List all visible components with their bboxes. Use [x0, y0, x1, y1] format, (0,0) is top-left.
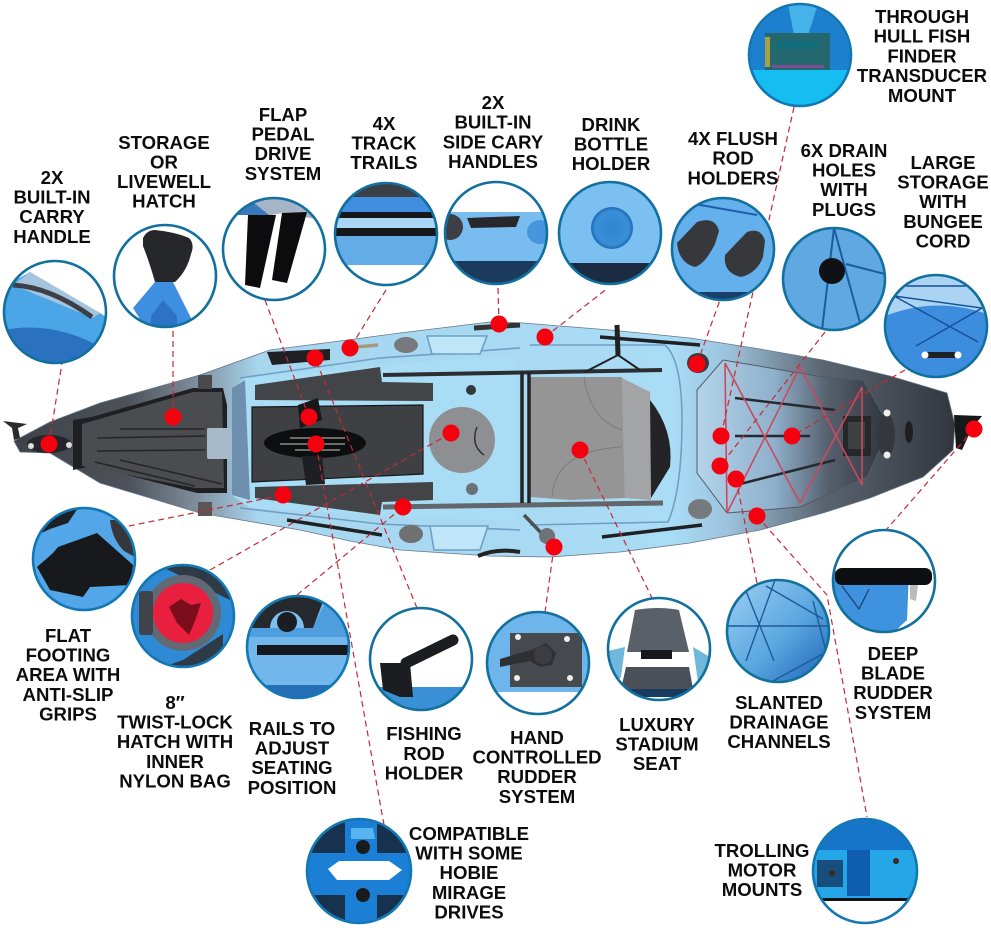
label: trolling motor mounts: MOTOR	[728, 860, 797, 881]
label: track trails: TRAILS	[350, 152, 418, 173]
photo: bottle cup	[559, 182, 661, 284]
label: side carry handles: HANDLES	[448, 151, 538, 172]
label: fish finder mount: MOUNT	[888, 85, 957, 106]
label: deep blade rudder: SYSTEM	[855, 702, 931, 723]
bow carry handle	[27, 435, 72, 453]
label: bungee storage: STORAGE	[897, 172, 989, 193]
label: seating rails: RAILS TO	[249, 718, 335, 739]
label: hobie mirage compatibility: MIRAGE	[432, 882, 506, 903]
callout markers	[40, 316, 982, 556]
label: side carry handles: BUILT-IN	[454, 112, 532, 133]
label: flap pedal drive: PEDAL	[251, 124, 315, 145]
label: twist-lock hatch: TWIST-LOCK	[117, 712, 233, 733]
label: flat footing: ANTI-SLIP	[23, 684, 113, 705]
hatch clasp	[207, 428, 235, 459]
label: fish finder mount: HULL FISH	[874, 26, 970, 47]
round twist-lock hatch	[429, 385, 495, 495]
label: twist-lock hatch: 8″	[165, 692, 185, 713]
label: flush rod holders: 4X FLUSH	[688, 128, 778, 149]
bungee cord	[725, 363, 862, 513]
label: stadium seat: STADIUM	[615, 734, 699, 755]
label: drink bottle holder: HOLDER	[572, 153, 651, 174]
label: bungee storage: WITH	[919, 191, 967, 212]
panel: track trails	[335, 113, 437, 285]
label: fishing rod holder: ROD	[403, 743, 445, 764]
panel: hand rudder	[472, 612, 602, 807]
panel: drainage channels	[727, 580, 831, 752]
label: carry handle: BUILT-IN	[13, 187, 91, 208]
label: carry handle: CARRY	[19, 206, 85, 227]
label: drink bottle holder: DRINK	[582, 114, 641, 135]
label: fish finder mount: FINDER	[887, 45, 957, 66]
seating rail bottom	[383, 503, 663, 507]
photo: track rails	[335, 183, 437, 285]
label: drink bottle holder: BOTTLE	[574, 134, 648, 155]
label: fishing rod holder: HOLDER	[385, 763, 464, 784]
label: hobie mirage compatibility: COMPATIBLE	[409, 823, 529, 844]
photo: side handle	[437, 182, 553, 284]
label: deep blade rudder: BLADE	[861, 663, 925, 684]
flush rod holders	[394, 337, 712, 543]
panel: flush rod holders	[672, 128, 778, 300]
label: bungee storage: BUNGEE	[903, 211, 983, 232]
deck moulding lines	[240, 336, 682, 550]
label: flush rod holders: HOLDERS	[688, 167, 778, 188]
label: hand rudder: SYSTEM	[499, 786, 575, 807]
label: flat footing: GRIPS	[39, 703, 97, 724]
label: fish finder mount: THROUGH	[875, 6, 969, 27]
label: drain holes: HOLES	[812, 160, 876, 181]
photo: storage hatch	[114, 225, 216, 327]
panel: hobie mirage compatibility	[307, 819, 529, 923]
panel: seating rails	[247, 596, 349, 798]
label: side carry handles: 2X	[482, 92, 505, 113]
label: trolling motor mounts: TROLLING	[714, 840, 810, 861]
photo: rudder lever plate	[487, 612, 589, 714]
label: drainage channels: CHANNELS	[727, 731, 831, 752]
label: storage hatch: STORAGE	[118, 132, 210, 153]
kayak top view	[3, 322, 982, 557]
seating rail top	[383, 370, 662, 375]
side handles	[474, 325, 520, 556]
photo: mirage drive slot	[307, 819, 411, 923]
panel: deep blade rudder	[833, 530, 935, 723]
photo: rudder blade	[833, 530, 935, 632]
panel: drain holes	[783, 140, 887, 330]
photo: transducer mount	[749, 4, 851, 106]
label: carry handle: HANDLE	[13, 226, 91, 247]
panel: carry handle	[4, 167, 106, 363]
panel: bungee storage	[885, 152, 989, 377]
stern channels	[735, 398, 835, 484]
label: storage hatch: LIVEWELL	[117, 171, 211, 192]
label: drainage channels: SLANTED	[735, 692, 823, 713]
label: seating rails: POSITION	[248, 777, 336, 798]
panel: fishing rod holder	[370, 608, 472, 784]
bow tip fitting	[3, 421, 27, 440]
panel: twist-lock hatch	[117, 565, 234, 791]
seat	[522, 325, 671, 503]
label: stadium seat: LUXURY	[619, 714, 695, 735]
label: twist-lock hatch: NYLON BAG	[119, 770, 231, 791]
panel: stadium seat	[608, 598, 710, 774]
label: hand rudder: RUDDER	[497, 766, 577, 787]
label: hobie mirage compatibility: WITH SOME	[415, 843, 523, 864]
lower anti-slip pad	[255, 482, 433, 515]
label: fishing rod holder: FISHING	[386, 723, 462, 744]
upper anti-slip pad	[255, 367, 433, 401]
label: drain holes: WITH	[820, 179, 868, 200]
photo: motor mounts	[813, 819, 917, 923]
label: hobie mirage compatibility: HOBIE	[440, 862, 498, 883]
photo: carry handle	[4, 261, 106, 363]
photo: flap fins	[223, 198, 325, 300]
photo: rod holder caps	[672, 198, 774, 300]
label: twist-lock hatch: INNER	[146, 751, 204, 772]
leader lines	[49, 107, 974, 825]
label: carry handle: 2X	[41, 167, 64, 188]
panel: storage hatch	[114, 132, 216, 327]
label: track trails: 4X	[373, 113, 396, 134]
stern handle	[877, 410, 913, 458]
side mounted paddle rest	[267, 349, 330, 365]
label: hand rudder: HAND	[510, 727, 564, 748]
label: deep blade rudder: RUDDER	[853, 682, 933, 703]
side track rails	[287, 337, 702, 537]
label: flat footing: FOOTING	[26, 645, 110, 666]
label: stadium seat: SEAT	[633, 753, 682, 774]
stern rudder mount	[954, 415, 982, 450]
photo: seat rail	[247, 596, 349, 698]
bow storage hatch	[73, 375, 227, 516]
label: flush rod holders: ROD	[712, 148, 754, 169]
rudder hand lever	[524, 515, 555, 544]
label: bungee storage: LARGE	[910, 152, 976, 173]
label: twist-lock hatch: HATCH WITH	[117, 731, 233, 752]
label: side carry handles: SIDE CARY	[443, 131, 544, 152]
label: flat footing: FLAT	[45, 625, 92, 646]
hull	[14, 322, 955, 557]
panel: fish finder mount	[749, 4, 988, 106]
label: flat footing: AREA WITH	[16, 664, 120, 685]
panel: drink bottle holder	[559, 114, 661, 284]
label: hobie mirage compatibility: DRIVES	[434, 901, 504, 922]
label: drain holes: 6X DRAIN	[801, 140, 887, 161]
label: drain holes: PLUGS	[812, 199, 876, 220]
label: fish finder mount: TRANSDUCER	[857, 65, 988, 86]
photo: seat	[608, 598, 710, 700]
label: drainage channels: DRAINAGE	[729, 712, 829, 733]
centre cockpit recess	[232, 355, 515, 520]
label: storage hatch: HATCH	[132, 190, 196, 212]
label: seating rails: SEATING	[251, 757, 333, 778]
photo: channels	[727, 580, 829, 682]
panel: flap pedal drive	[223, 104, 325, 300]
photo: drain plug	[783, 228, 885, 330]
stern well	[697, 360, 890, 513]
label: storage hatch: OR	[150, 152, 179, 172]
label: flap pedal drive: DRIVE	[255, 143, 311, 164]
label: hand rudder: CONTROLLED	[472, 747, 602, 768]
panel: flat footing	[16, 508, 135, 724]
pedal plate	[252, 398, 423, 485]
panel: side carry handles	[443, 96, 548, 286]
label: trolling motor mounts: MOUNTS	[722, 879, 802, 900]
label: deep blade rudder: DEEP	[868, 643, 918, 664]
label: flap pedal drive: FLAP	[259, 104, 307, 125]
photo: anti-slip pad	[33, 508, 135, 610]
stern hatch	[843, 416, 871, 456]
panel: trolling motor mounts	[714, 819, 917, 923]
photo: hatch with red bag	[132, 565, 234, 667]
label: flap pedal drive: SYSTEM	[245, 163, 321, 184]
photo: rod holder	[370, 608, 472, 710]
label: track trails: TRACK	[351, 132, 417, 154]
label: bungee storage: CORD	[916, 230, 970, 251]
label: seating rails: ADJUST	[255, 738, 330, 759]
photo: bungee deck	[885, 275, 987, 377]
